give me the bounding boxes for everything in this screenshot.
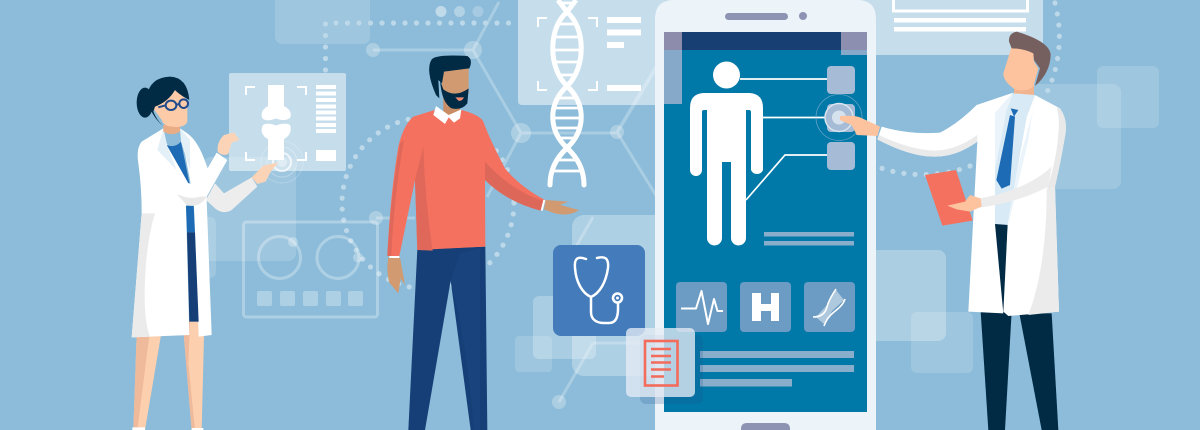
panel: DNA analysis card (518, 0, 682, 105)
legs (132, 322, 204, 430)
sleeve and hand (947, 167, 1052, 212)
text lines (700, 232, 854, 386)
cuffs (389, 200, 544, 257)
front arm and hand (138, 132, 239, 206)
icon: small DNA (804, 282, 855, 332)
sweater (387, 109, 545, 256)
card: stethoscope (553, 245, 645, 336)
phone body (655, 0, 876, 430)
body figure (690, 62, 763, 246)
panel: monitor outline (244, 222, 378, 317)
trousers (408, 247, 487, 430)
connector lines (740, 79, 827, 200)
icon: DNA helix (548, 0, 586, 188)
tie (996, 108, 1018, 189)
back sleeve and pointing hand (206, 162, 278, 212)
body part buttons (827, 66, 855, 170)
panel: ECG report card (841, 0, 1043, 55)
neck (1014, 85, 1034, 105)
pointing hand (840, 116, 880, 136)
head (429, 55, 471, 109)
trousers (981, 224, 1058, 430)
phone (655, 0, 876, 430)
panel overlays on screen (664, 32, 867, 104)
neck (443, 95, 460, 115)
hands (387, 200, 579, 293)
character: male doctor (840, 32, 1066, 430)
character: man in coral sweater (387, 55, 579, 430)
touch ripple (816, 94, 862, 140)
phone screen (664, 32, 867, 412)
panel: knee x-ray (229, 73, 346, 183)
coat collar (995, 93, 1035, 225)
white coat (132, 128, 212, 337)
icon: heartbeat (676, 282, 727, 332)
icon: hospital H (740, 282, 791, 332)
head (1003, 32, 1051, 91)
background translucent panels (190, 0, 1159, 376)
network lines and nodes (366, 2, 663, 409)
shirt collar (433, 106, 461, 124)
card: document (626, 328, 703, 404)
head (137, 77, 189, 134)
phone top bar (664, 32, 867, 50)
clipboard (925, 170, 973, 226)
coat collar (157, 128, 190, 170)
white coat (877, 93, 1066, 316)
dress (167, 142, 199, 322)
phone speaker and camera (725, 12, 807, 430)
dotted connector lines (326, 3, 1059, 289)
shirt (995, 93, 1035, 225)
decorative large dots (436, 6, 484, 17)
character: woman doctor (132, 77, 278, 430)
